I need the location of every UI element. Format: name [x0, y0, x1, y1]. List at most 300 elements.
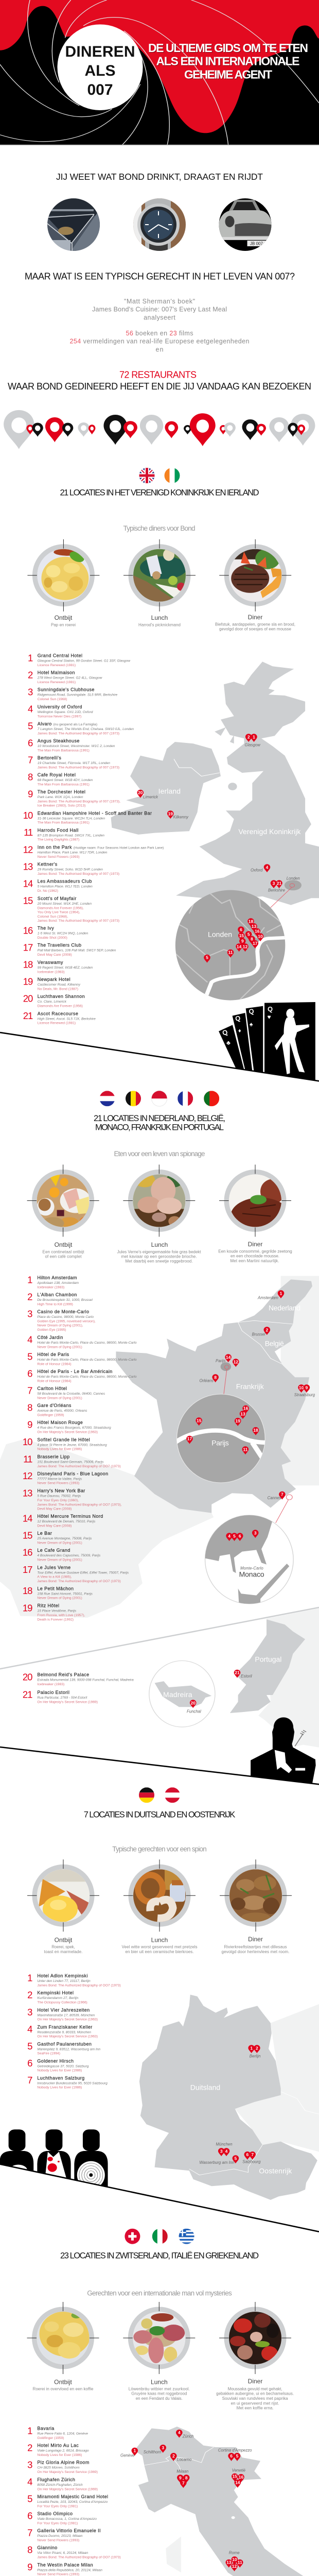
item 2: 2: [27, 1292, 32, 1302]
meal captions south: Moussaka gevuld met gehakt,: [228, 2386, 282, 2391]
meal captions Germany: Rivierkreeftstaartjes met dillesaus: [224, 1945, 287, 1950]
meal captions continental: en een chocolade mousse.: [231, 1254, 279, 1259]
item 7: 7: [27, 1385, 32, 1396]
meal captions south: [33, 2378, 294, 2410]
illustration: playing cards with bond girl: Q: [249, 1007, 254, 1015]
flag: Ireland: [165, 468, 180, 483]
item 19: [23, 976, 81, 991]
item 4: Wellington Square. OX1 2JD, Oxford: [38, 710, 93, 714]
item 5: 7 Langton Street, The Worlds End, Chelsea. SW10 0JL, Londen: [38, 727, 134, 731]
item 9: [27, 2562, 102, 2576]
map pins and labels: UK: 12: [243, 944, 247, 949]
map pins and labels: France: 18: [253, 1428, 258, 1433]
item 2: 2: [27, 1990, 32, 2001]
meal captions south: Gruyère kaas met roggebrood: [131, 2392, 187, 2396]
item 8: Avenue de Paris, 45000, Orleans: [37, 1409, 87, 1413]
map pins and labels: France: 8: [214, 1375, 217, 1380]
list: UK restaurants: [23, 652, 164, 1025]
map pins and labels: Germany: Salzbourg: [242, 2160, 261, 2164]
item 13: 13: [23, 1487, 32, 1498]
item 7: [28, 755, 119, 769]
map pins and labels: Italy: 14: [235, 2480, 240, 2485]
flag: Netherlands: [99, 1091, 115, 1106]
item 7: 58 Boulevard de la Croisette, 06400, Cannes: [37, 1392, 105, 1396]
item 4: [27, 2477, 98, 2491]
item 3: Piz Gloria Alpine Room: [37, 2460, 90, 2465]
flag: Greece: [179, 2229, 194, 2244]
meal captions Germany: [44, 1936, 289, 1954]
map: Portugal and Madeira: 20: [190, 1700, 196, 1705]
item 16: 16: [23, 925, 33, 936]
item 1: [27, 2425, 88, 2440]
map pins and labels: Italy: [120, 2430, 252, 2571]
item 1: Glasgow Central Station, 99 Gordon Street. G1 3SF, Glasgow: [38, 659, 131, 663]
map pins and labels: Italy: 1: [133, 2448, 136, 2453]
map pins and labels: Italy: 12: [232, 2564, 237, 2569]
item 15: 15: [23, 895, 33, 906]
item 17: 17: [23, 942, 33, 953]
illustration: playing cards with bond girl: Q: [235, 1014, 241, 1023]
inset: Monaco: Monte-Carlo: [240, 1566, 263, 1571]
heading: 7 locations: 7 LOCATIES IN DUITSLAND EN OOSTENRIJK: [84, 1810, 235, 1819]
item 1: Rue Pierre Fatio 6, 1204, Genève: [37, 2432, 88, 2436]
item 4: 4: [28, 704, 33, 715]
map pins and labels: France: 13: [240, 1411, 245, 1416]
item 4: 4: [27, 2024, 32, 2035]
item 15: Colonel Sun (1968),: [38, 915, 68, 919]
item 16: Double Shot (2000): [38, 936, 67, 940]
illustration: shooting targets: [0, 2129, 108, 2187]
item 8: Cafe Royal Hotel: [38, 772, 76, 777]
meal captions south: gebakken aubergine, ui en bechamelsaus.: [216, 2392, 294, 2396]
item 6: Nobody Lives for Ever (1986): [37, 2069, 82, 2073]
item 7: Luchthaven Salzburg: [37, 2075, 85, 2080]
item 6: For Your Eyes Only (1981): [37, 2521, 78, 2525]
item 11: 11: [23, 1453, 32, 1464]
map pins and labels: Italy: 9: [179, 2475, 182, 2480]
map: Portugal and Madeira: Funchal: [187, 1709, 201, 1714]
item 6: 10 Woodstock Street, Westminster. W1C 2, Londen: [38, 744, 115, 748]
text block: book analysis: en: [155, 346, 164, 353]
subtitle: [148, 41, 308, 81]
item 3: Hotel Vier Jahreszeiten: [37, 2007, 90, 2012]
item 15: 20 Mount Street. W1K 2HE, Londen: [37, 902, 92, 906]
map: UK and Ireland: [111, 662, 319, 1001]
item 21: High Street, Ascot. SL5 7JX, Berkshire: [38, 1017, 96, 1021]
item 8: Gare d'Orléans: [37, 1403, 72, 1408]
map pins and labels: Germany: Wasserburg am Inn: [200, 2160, 234, 2165]
illustration: playing cards with bond girl: Q: [221, 1028, 229, 1037]
item 13: [23, 1487, 122, 1511]
item 8: The Man From Barbarossa (1991): [38, 783, 90, 786]
map pins and labels: UK: 1: [253, 734, 255, 739]
illustration: bond silhouette: [251, 1717, 316, 1784]
item 18: Veraswamy: [38, 960, 63, 965]
map pins and labels: Germany: [190, 2045, 292, 2175]
item 7: James Bond: The Authorised Biography of 007 (1973): [38, 766, 119, 769]
subtitle: GEHEIME AGENT: [184, 67, 272, 81]
item 5: Hotel de Paris Monte-Carlo, Place du Casino, 98000, Monte-Carlo: [37, 1358, 137, 1362]
map pins and labels: Germany: 2: [256, 2045, 258, 2050]
item 10: 4 place St Pierre le Jeune, 67000, Straatsburg: [37, 1443, 107, 1447]
item 19: From Russia, with Love (1957),: [37, 1614, 85, 1617]
item 2: Kurfürstendamm 27, Berlijn: [37, 1996, 79, 2000]
map pins and labels: Italy: Schilthorn: [144, 2450, 161, 2454]
item 5: Località Pezie, 103, 32043, Cortina d'Ampezzo: [37, 2500, 108, 2504]
item 10: Edwardian Hampshire Hotel - Scoff and Banter Bar: [38, 810, 152, 816]
map pins and labels: UK: Limerick: [143, 794, 158, 799]
map pins and labels: UK: Verenigd Koninkrijk: [238, 827, 301, 836]
food: meat platter: [123, 2302, 195, 2374]
map pins and labels: UK: 11: [228, 950, 233, 955]
item 20: 20: [23, 993, 33, 1004]
item 8: Giannino: [37, 2545, 58, 2550]
map pins and labels: France: 16: [243, 1406, 249, 1411]
meal captions UK: Ontbijt: [55, 614, 73, 621]
item 13: Devil May Care (2008): [37, 1507, 72, 1511]
item 3: Golden Eye (1995, novelised version),: [37, 1319, 96, 1323]
item 2: High Time to Kill (1999): [37, 1302, 73, 1306]
subheading: espionage food: Eten voor een leven van spionage: [114, 1150, 205, 1158]
item 1: Hotel Adlon Kempinski: [37, 1973, 88, 1978]
section: UK and Ireland: [23, 468, 319, 1025]
item 5: 5: [28, 721, 33, 732]
meal captions south: Souvlaki van rundvlees met paprika: [222, 2396, 288, 2401]
item 18: Icebreaker (1983): [38, 970, 65, 974]
item 11: The Living Daylights (1987): [38, 838, 79, 842]
flag: France: [178, 1091, 193, 1106]
item 8: Via Vittor Pisani, 6, 20124, Milaan: [37, 2551, 88, 2555]
item 17: Devil May Care (2008): [38, 953, 72, 957]
item 6: 6: [27, 2511, 32, 2521]
item 18: [23, 959, 93, 974]
item 6: Angus Steakhouse: [38, 738, 80, 743]
item 5: 5: [27, 1351, 32, 1362]
item 6: [27, 1368, 137, 1383]
item 8: 8: [27, 1402, 32, 1413]
item 21: 21: [23, 1689, 32, 1700]
meal captions Germany: Veel witte worst geserveerd met pretzels: [121, 1945, 198, 1950]
item 20: 20: [23, 1671, 32, 1682]
item 3: [28, 686, 118, 701]
item 4: [28, 704, 93, 718]
map pins and labels: France: 12: [234, 1359, 238, 1364]
item 3: On Her Majesty's Secret Service (1963): [37, 2018, 98, 2022]
photo: aston martin: JB 007: [250, 241, 263, 246]
item 3: 3: [28, 686, 33, 697]
divider: black diagonal 3: [0, 2164, 319, 2232]
item 2: 2: [28, 669, 33, 680]
item 12: [23, 844, 164, 859]
inset: Monaco: 4: [228, 1533, 231, 1538]
map pins and labels: France: [186, 1290, 315, 1500]
item 17: 17: [23, 1564, 32, 1575]
map pins and labels: France: 10: [299, 1385, 304, 1390]
item 14: Hôtel Mercure Terminus Nord: [37, 1514, 103, 1519]
inset: Monaco: Monaco: [239, 1570, 264, 1579]
map pins and labels: Germany: 6: [246, 2152, 249, 2157]
map pins and labels: Italy: Genève: [120, 2453, 135, 2458]
item 4: Tomorrow Never Dies (1997): [38, 715, 81, 718]
subheading: man of mystery: Gerechten voor een internationale man vol mysteries: [87, 2290, 232, 2297]
item 2: Kempinski Hotel: [37, 1990, 74, 1995]
map pins and labels: UK: 13: [252, 924, 256, 929]
item 19: Newpark Hotel: [38, 977, 70, 982]
meal captions south: Diner: [248, 2378, 262, 2385]
map pins and labels: France: 19: [235, 1418, 240, 1423]
map pins and labels: Italy: 10: [232, 2557, 237, 2562]
illustration: playing cards with bond girl: ♦: [238, 1028, 241, 1034]
flag: Austria: [165, 1787, 180, 1803]
item 14: 12 Boulevard de Denain, 75010, Parijs: [37, 1520, 96, 1523]
map pins and labels: Italy: 7: [182, 2480, 185, 2485]
item 4: 8058 Zürich-Flughafen, Zürich: [37, 2483, 83, 2487]
item 17: [23, 1564, 129, 1583]
item 17: A View to a Kill (1985),: [37, 1575, 72, 1579]
map pins and labels: Italy: Venetië: [232, 2468, 246, 2472]
item 1: Grand Central Hotel: [38, 653, 82, 658]
item 4: Zum Franziskaner Keller: [37, 2024, 93, 2029]
item 3: Place du Casino, 98000, Monte Carlo: [37, 1315, 94, 1319]
item 16: 16: [23, 1547, 32, 1558]
map pins and labels: Germany: München: [216, 2142, 233, 2147]
item 7: [27, 2075, 108, 2090]
flag: Switzerland: [125, 2229, 140, 2244]
item 3: Golden Eye (1995): [37, 1328, 66, 1332]
map pins and labels: UK: [137, 734, 301, 963]
item 5: 5: [27, 2494, 32, 2504]
map pins and labels: UK: 10: [258, 934, 263, 939]
map pins and labels: France: Frankrijk: [236, 1382, 264, 1391]
item 1: 1: [27, 2425, 32, 2436]
item 3: CH-3825 Mürren, Schilthorn: [37, 2466, 80, 2470]
meal captions south: en een Fendant du Valais.: [136, 2396, 183, 2401]
map pins and labels: Germany: Berlijn: [250, 2054, 260, 2058]
item 16: Le Cafe Grand: [37, 1548, 70, 1553]
item 15: Diamonds Are Forever (1956),: [38, 906, 84, 910]
item 14: [23, 1513, 103, 1528]
item 12: 12: [23, 1470, 32, 1481]
item 21: [23, 1689, 98, 1704]
item 8: Goldfinger (1959): [37, 1413, 64, 1417]
meal captions continental: [42, 1241, 292, 1264]
item 1: Licence Renewed (1981): [38, 664, 76, 667]
item 1: 1: [28, 652, 33, 663]
heading: 72 restaurants: 72 RESTAURANTS: [119, 369, 197, 380]
map pins and labels: UK: 3: [273, 880, 275, 886]
item 6: 6: [28, 738, 33, 749]
item 9: Hôtel Maison Rouge: [37, 1420, 83, 1425]
photo: watch: [133, 198, 186, 251]
item 13: 13: [23, 861, 33, 872]
item 9: The Westin Palace Milan: [37, 2562, 93, 2567]
meal captions continental: of een café complet: [45, 1255, 82, 1259]
meal captions UK: Diner: [248, 614, 262, 621]
meal captions south: Löwenbräu witbier met zuurkool.: [129, 2386, 190, 2391]
map pins and labels: UK: 16: [255, 929, 260, 934]
map: Portugal and Madeira: [149, 1608, 319, 1748]
map pins and labels: France: 1: [280, 1291, 282, 1296]
map pins and labels: UK: 5: [206, 955, 208, 960]
map pins and labels: Italy: 4: [178, 2430, 181, 2435]
item 10: 10: [23, 1436, 32, 1447]
map pins and labels: Italy: Zürich: [182, 2434, 193, 2438]
flag: Monaco: [152, 1091, 167, 1106]
item 15: You Only Live Twice (1964),: [38, 911, 80, 914]
item 7: 19 Charlotte Street, Fitzrovia. W1T 1RL, Londen: [38, 761, 110, 765]
item 1: Apollolaan 138, Amsterdam: [37, 1281, 79, 1285]
item 10: Sofitel Grande Ile Hôtel: [37, 1437, 90, 1442]
food: toast, bacon and eggs: [27, 1859, 99, 1931]
item 13: James Bond: The Authorised Biography of 007 (1973): [38, 872, 119, 876]
item 9: 9: [27, 2562, 32, 2572]
item 5: Miramonti Majestic Grand Hotel: [37, 2494, 108, 2499]
item 4: [27, 1334, 137, 1349]
item 1: Bavaria: [37, 2426, 55, 2431]
item 15: [23, 895, 119, 923]
meal captions continental: Met een Martini natuurlijk.: [231, 1259, 279, 1263]
item 19: Death is Forever (1992): [37, 1618, 74, 1621]
item 5: [28, 721, 134, 735]
map pins and labels: Italy: 6: [230, 2453, 233, 2459]
item 8: 68 Regent Street. W1B 4DY, Londen: [38, 778, 93, 782]
map pins and labels: Italy: Cortina d'Ampezzo: [218, 2448, 252, 2453]
inset: Monaco: 5: [233, 1533, 236, 1538]
item 7: Carlton Hôtel: [37, 1386, 67, 1391]
item 4: Côté Jardin: [37, 1335, 63, 1340]
flag: Italy: [152, 2229, 168, 2244]
map pins and labels: Italy: 16: [239, 2475, 243, 2480]
item 19: Castlecomer Road, Kilkenny: [38, 983, 81, 987]
item 13: For Your Eyes Only (1960),: [37, 1499, 79, 1502]
meal captions Germany: Roerei, spek,: [51, 1945, 75, 1950]
text block: book analysis: [70, 298, 250, 353]
item 6: 6: [27, 2058, 32, 2069]
item 21: Ascot Racecourse: [38, 1011, 78, 1016]
item 1: [28, 652, 131, 667]
item 16: 4 Boulevard des Capucines, 75009, Parijs: [37, 1554, 101, 1557]
item 5: For Your Eyes Only (1981): [37, 2504, 78, 2508]
map pins and labels: France: Brussel: [252, 1332, 265, 1337]
item 18: 99 Regent Street. W1B 4EZ, Londen: [38, 966, 93, 970]
item 16: [23, 1547, 101, 1562]
map pins and labels: UK: 5: [247, 931, 250, 937]
item 7: 7: [27, 2528, 32, 2538]
map pins and labels: UK: Oxford: [251, 868, 263, 873]
heading: 21 locations continental: [94, 1114, 225, 1132]
item 9: Ice Breaker (1983), Solo (2013): [38, 804, 85, 808]
item 6: The Man From Barbarossa (1991): [38, 749, 90, 752]
item 15: Never Dream of Dying (2001): [37, 1541, 82, 1545]
list: continental restaurants: [23, 1275, 137, 1704]
item 2: [27, 1990, 87, 2004]
map pins and labels: France: 15: [197, 1418, 202, 1423]
food: continental breakfast: [27, 1164, 99, 1236]
item 2: De Brouckèreplein 31, 1000, Brussel: [37, 1298, 93, 1302]
item 12: Disneyland Paris - Blue Lagoon: [37, 1471, 108, 1476]
item 7: Never Send Flowers (1993): [37, 2538, 79, 2542]
map pins and labels: Italy: 5: [236, 2453, 239, 2459]
title: DINEREN: [65, 43, 135, 60]
item 13: Harry's New York Bar: [37, 1488, 85, 1494]
map pins and labels: Italy: 8: [185, 2475, 188, 2480]
meal captions continental: Lunch: [151, 1241, 168, 1248]
food: scrambled eggs: [27, 539, 99, 612]
meal captions continental: Een koude consommé, gegrilde zeetong: [218, 1249, 292, 1253]
map pins and labels: Italy: 2: [172, 2453, 175, 2459]
heading: 21 locations continental: 21 LOCATIES IN NEDERLAND, BELGIË,: [94, 1114, 225, 1123]
item 6: Viale Bonacossa, 1, Cortina d'Ampezzo: [37, 2517, 97, 2521]
item 2: Licence Renewed (1981): [38, 681, 76, 684]
item 1: Hilton Amsterdam: [37, 1275, 77, 1280]
item 20: Co. Clare, Limerick: [38, 1000, 67, 1004]
map pins and labels: Germany: Oostenrijk: [259, 2166, 292, 2175]
item 18: 18: [23, 1585, 32, 1596]
heading: 72 restaurants: [8, 369, 311, 392]
item 2: L'Alban Chambon: [37, 1292, 77, 1297]
item 17: [23, 942, 116, 957]
item 3: [27, 1309, 96, 1332]
map pins and labels: UK: Berkshire: [268, 888, 286, 892]
meal captions Germany: en bier uit een ceramische bierkroes.: [126, 1950, 193, 1954]
item 14: 14: [23, 878, 33, 889]
map pins and labels: Italy: Locarno: [177, 2458, 192, 2462]
meal captions continental: Met daarbij een sneetje roggebrood.: [126, 1259, 192, 1264]
meal captions UK: Biefstuk, aardappelen, groene sla en brood,: [215, 622, 295, 626]
map pins and labels: UK: Ierland: [158, 787, 181, 795]
item 12: Never Send Flowers (1993): [37, 1482, 79, 1485]
item 3: [27, 2007, 98, 2022]
item 2: [27, 2442, 89, 2457]
map pins and labels: France: België: [265, 1340, 284, 1348]
item 2: 278 West George Street. G2 4LL, Glasgow: [37, 676, 103, 680]
item 12: 12: [23, 844, 33, 855]
item 20: Estrada Monumental 139, 9000-098 Funchal, Funchal, Madreira: [37, 1679, 134, 1682]
flag: Portugal: [204, 1091, 219, 1106]
meal captions UK: Harrod's picknickmand: [138, 622, 181, 628]
item 21: Licence Renewed (1981): [38, 1022, 76, 1025]
item 11: [23, 1453, 121, 1468]
map pins and labels: UK: 21: [277, 880, 281, 886]
item 9: On Her Majesty's Secret Service (1963): [37, 1430, 98, 1434]
divider: gray diagonal: [0, 1607, 319, 1669]
item 12: [23, 1470, 108, 1485]
item 15: 25 Avenue Montaigne, 75008, Parijs: [37, 1537, 92, 1540]
item 3: Colonel Sun (1968): [38, 698, 67, 701]
inset: Monaco: [203, 1495, 293, 1606]
map pins and labels: France: 7: [281, 1492, 283, 1497]
item 15: 15: [23, 1530, 32, 1541]
header: gun barrel banner: [0, 0, 319, 145]
item 16: Never Dream of Dying (2001): [37, 1558, 82, 1562]
title: [65, 43, 135, 98]
item 12: Inn on the Park (Huidige naam: Four Seasons Hotel London aan Park Lane): [38, 845, 164, 850]
item 11: Brasserie Lipp: [37, 1454, 70, 1460]
meal captions south: Met een koffie erna.: [237, 2405, 274, 2410]
item 15: Scott's of Mayfair: [38, 896, 77, 901]
illustration: playing cards with bond girl: ♠: [250, 1021, 253, 1028]
map pins and labels: UK: 4: [266, 865, 269, 870]
item 8: James Bond: The Authorized Biography of OO7 (1973): [37, 2555, 121, 2559]
item 3: Never Dream of Dying (2001),: [37, 1324, 83, 1328]
map pins and labels: France: Parijs: [211, 1439, 229, 1447]
meal captions continental: met kaviaar op een geroosterde brioche.: [121, 1255, 197, 1259]
item 1: [27, 1275, 79, 1289]
item 13: 29 Romilly Street, Soho. W1D 5HP, Londen: [37, 868, 103, 872]
item 4: University of Oxford: [38, 704, 82, 709]
section: Benelux, Monaco, France, Portugal: [0, 1091, 319, 1748]
item 9: Park Lane. W1K 1QA, Londen: [38, 795, 83, 799]
